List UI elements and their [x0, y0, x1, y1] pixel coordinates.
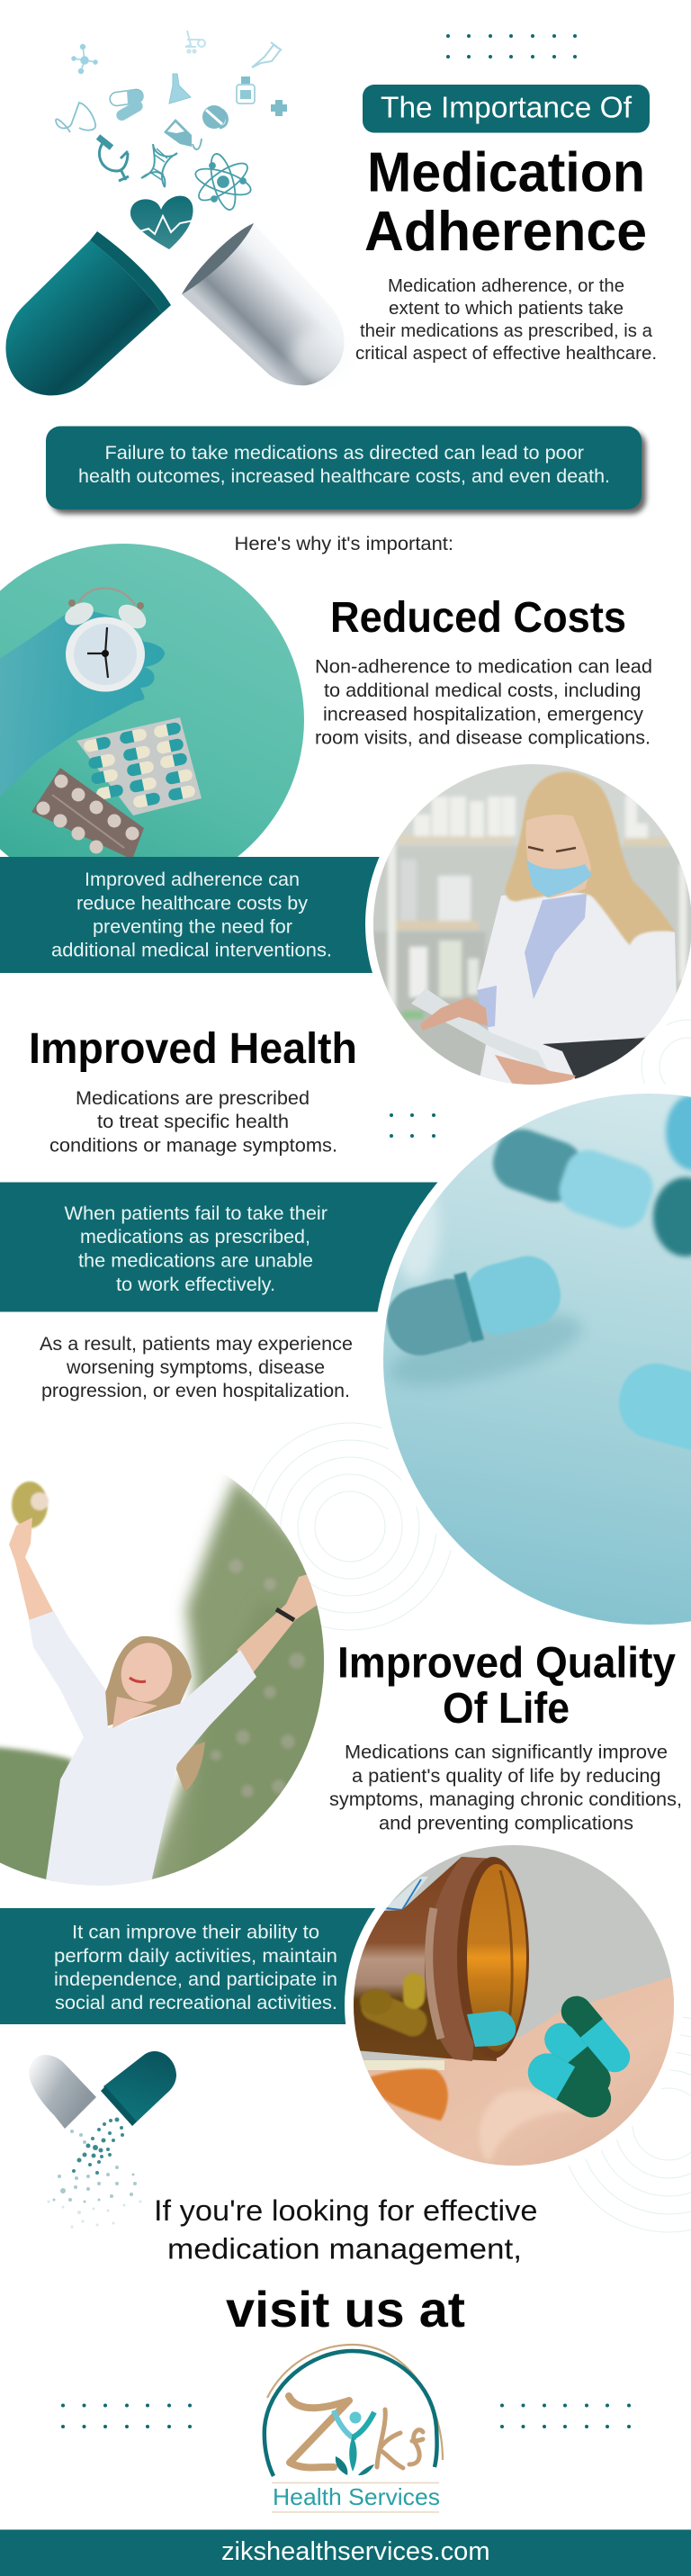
icon: shopping cart	[185, 31, 205, 52]
logo: Ziks Health Services	[265, 2345, 443, 2512]
closing text: If you're looking for effective	[154, 2194, 538, 2227]
logo Z	[289, 2396, 349, 2468]
heading: Improved Quality Of Life: Of Life	[443, 1685, 570, 1733]
face	[525, 815, 591, 898]
text: as a result: worsening symptoms, disease	[66, 1357, 325, 1378]
text: quality of life: and preventing complications	[379, 1813, 633, 1834]
icon: flask	[169, 74, 191, 104]
band: improved adherence: preventing the need for	[93, 916, 292, 938]
blister pack dark	[31, 768, 144, 860]
alarm clock	[77, 588, 135, 607]
icon: heart with pulse	[130, 196, 198, 249]
intro text: Medication adherence, or the	[388, 276, 624, 296]
text: reduced costs	[315, 657, 652, 749]
title pill	[363, 85, 650, 133]
folder white	[411, 988, 549, 1073]
text: as a result: progression, or even hospitalization.	[41, 1381, 350, 1401]
mask	[526, 860, 592, 897]
dots: health	[390, 1113, 435, 1138]
subheading: Here's why it's important:	[234, 534, 453, 554]
capsule 2	[544, 2023, 611, 2088]
icon: IV bottle	[164, 119, 202, 149]
intro text: critical aspect of effective healthcare.	[355, 344, 657, 364]
hand	[363, 1977, 674, 2166]
photo: clock and pills on mint circle	[0, 544, 304, 857]
heading: Improved Quality Of Life	[337, 1640, 676, 1733]
callout: failure warning	[46, 427, 646, 514]
text: as a result: As a result, patients may experience	[40, 1334, 353, 1355]
text: reduced costs: to additional medical costs, including	[324, 680, 641, 701]
callout: failure warning: health outcomes, increased healthcare costs, and even death.	[78, 466, 610, 487]
shirt	[29, 1611, 256, 1887]
callout: failure warning: Failure to take medications as directed can lead to poor	[104, 443, 584, 464]
title: Adherence	[364, 201, 647, 263]
icon: molecule	[72, 45, 97, 74]
face	[121, 1643, 173, 1702]
text: improved health: conditions or manage symptoms.	[49, 1136, 337, 1156]
dots: footer left	[61, 2403, 192, 2428]
logo figure	[349, 2412, 362, 2423]
band: improved adherence: additional medical interventions.	[51, 940, 332, 961]
left arm	[9, 1518, 54, 1622]
band: when patients fail: to work effectively.	[116, 1274, 275, 1295]
bouquet	[12, 1482, 49, 1528]
text: reduced costs: increased hospitalization, emergency	[323, 704, 644, 725]
photo: amber bottle and capsules in hand	[354, 1845, 674, 2166]
intro text	[355, 276, 657, 364]
far trees left	[0, 1746, 72, 1890]
band: improved adherence: reduce healthcare costs by	[76, 893, 309, 914]
capsule 3	[521, 2047, 618, 2124]
shirt	[525, 894, 587, 999]
capsule in bottle	[467, 2011, 516, 2047]
band: daily activities: social and recreational activities.	[55, 1993, 337, 2013]
title	[364, 142, 647, 263]
decorative rings	[247, 1020, 691, 2232]
logo wordmark: Health Services	[273, 2483, 440, 2510]
icon: medical plus	[271, 100, 287, 116]
closing text: medication management,	[167, 2232, 522, 2265]
text: reduced costs: room visits, and disease complications.	[315, 727, 651, 749]
band: improved adherence: Improved adherence can	[85, 869, 300, 890]
photo: joyful woman outdoors	[0, 1476, 324, 1886]
band: when patients fail: the medications are unable	[78, 1251, 313, 1271]
icon: medicine bottle	[237, 77, 255, 104]
icon: stethoscope	[56, 103, 95, 132]
photo: pharmacist in mask	[369, 761, 691, 1094]
dots: footer right	[500, 2403, 631, 2428]
text: improved health: to treat specific health	[97, 1112, 289, 1132]
heading: Improved Health: Improved Health	[29, 1025, 357, 1073]
bottle opening	[457, 1857, 529, 2058]
heading: Reduced Costs: Reduced Costs	[330, 594, 626, 642]
coat	[477, 893, 677, 1094]
text: quality of life: symptoms, managing chronic conditions,	[329, 1789, 682, 1810]
logo k and s	[377, 2409, 423, 2468]
powder	[72, 2117, 124, 2175]
glove	[0, 610, 165, 806]
icon: teal half	[103, 2051, 176, 2126]
intro text: extent to which patients take	[389, 299, 624, 319]
bottle body	[342, 1857, 497, 2061]
capsule B	[386, 1255, 561, 1356]
capsules inside bottle	[359, 1972, 428, 2038]
icon: white half	[29, 2055, 96, 2129]
hands	[420, 997, 488, 1031]
band: when patients fail: medications as prescribed,	[80, 1227, 310, 1247]
illustration: open capsule with medical icons	[5, 31, 348, 395]
capsule shadow	[389, 1311, 584, 1390]
text: quality of life	[329, 1743, 682, 1834]
text: reduced costs: Non-adherence to medication can lead	[315, 657, 652, 677]
intro text: their medications as prescribed, is a	[360, 321, 653, 341]
title: Medication	[367, 142, 645, 203]
bottle label	[387, 1877, 428, 1912]
text: improved health: Medications are prescribed	[76, 1088, 310, 1109]
footer bar: zikshealthservices.com	[221, 2537, 489, 2566]
icon: atom	[193, 151, 254, 212]
band: when patients fail: When patients fail to take their	[65, 1203, 328, 1224]
hair	[506, 771, 675, 945]
text: as a result	[40, 1334, 353, 1401]
blister pack light	[76, 717, 202, 815]
capsule E	[653, 1177, 691, 1256]
right arm	[237, 1573, 319, 1674]
closing text	[154, 2194, 538, 2265]
bottle rim	[425, 1857, 486, 2061]
dots: title	[446, 34, 577, 59]
footer bar	[0, 2529, 691, 2576]
icon: syringe	[252, 42, 282, 68]
band: improved adherence	[0, 756, 691, 1093]
hair	[105, 1636, 192, 1726]
icon: tablet	[202, 105, 227, 129]
folder dark	[543, 1038, 646, 1080]
icon: DNA helix	[141, 144, 177, 187]
capsule A	[490, 1127, 655, 1229]
icon: microscope	[98, 137, 129, 181]
band: daily activities: It can improve their ability to	[72, 1923, 319, 1942]
icon: teal capsule half	[5, 231, 171, 395]
title pill: The Importance Of	[381, 90, 633, 124]
heading: Improved Quality Of Life: Improved Quality	[337, 1640, 676, 1687]
foliage	[140, 1476, 324, 1882]
band: daily activities	[0, 1836, 683, 2175]
icon: white capsule half	[182, 223, 348, 385]
call to action: visit us at	[226, 2281, 465, 2337]
band: when patients fail	[0, 1084, 691, 1635]
capsule 1	[561, 1996, 630, 2072]
band: daily activities: independence, and participate in	[54, 1969, 337, 1990]
text: improved health	[49, 1088, 337, 1156]
icon: capsule	[109, 88, 145, 122]
text: quality of life: a patient's quality of life by reducing	[352, 1766, 660, 1787]
text: quality of life: Medications can significantly improve	[345, 1743, 668, 1762]
band: daily activities: perform daily activities, maintain	[54, 1946, 337, 1967]
illustration: small capsule releasing powder	[29, 2051, 176, 2229]
capsule C	[618, 1363, 691, 1451]
logo arcs	[265, 2345, 443, 2476]
capsule D	[666, 1094, 691, 1170]
photo: blue capsules	[378, 1089, 691, 1629]
